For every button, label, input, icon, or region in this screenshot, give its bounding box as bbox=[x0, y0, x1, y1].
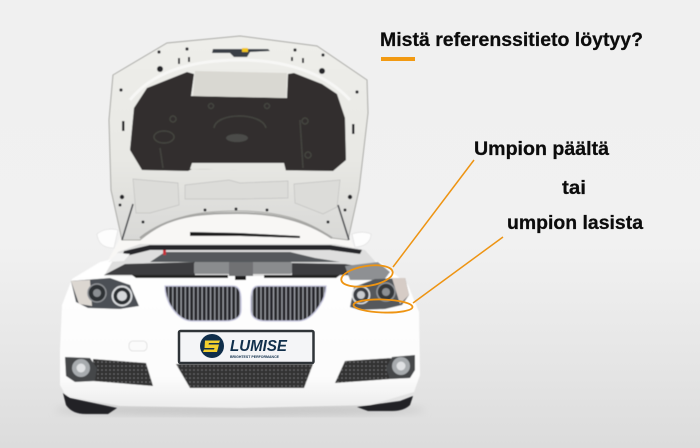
car photo illustration bbox=[60, 36, 420, 414]
logo badge bbox=[200, 334, 224, 358]
licence plate bbox=[179, 331, 314, 363]
left fog lamp bbox=[65, 357, 97, 382]
car body bbox=[60, 252, 420, 408]
lower hood embossed panels bbox=[133, 179, 340, 214]
pad highlights bbox=[154, 104, 311, 168]
tagline: BRIGHTEST PERFORMANCE bbox=[230, 355, 279, 359]
right headlight bbox=[350, 278, 409, 310]
open hood bbox=[109, 36, 368, 240]
arch shadow bbox=[140, 213, 332, 238]
plate frame bbox=[179, 331, 314, 363]
left tyre bbox=[63, 393, 117, 414]
latch yellow tag bbox=[242, 48, 248, 52]
title underline bbox=[381, 57, 415, 61]
right lower grille bbox=[335, 358, 391, 383]
vent panel bbox=[193, 71, 287, 98]
title: Mistä referenssitieto löytyy? bbox=[380, 30, 643, 51]
left headlight bbox=[71, 278, 139, 309]
right tyre bbox=[357, 396, 413, 411]
insulation pad bbox=[130, 72, 346, 171]
right kidney grille bbox=[251, 286, 326, 321]
callout: ellipse on headlight top bbox=[340, 262, 394, 290]
label: umpion lasista: umpion lasista bbox=[507, 213, 643, 234]
label: tai: tai bbox=[562, 178, 586, 199]
lower pad strip bbox=[190, 163, 286, 171]
right fog lamp bbox=[386, 355, 415, 379]
ground shadow bbox=[55, 404, 425, 416]
hood struts bbox=[122, 204, 349, 240]
left kidney grille bbox=[165, 286, 241, 321]
hood panel bbox=[109, 36, 368, 240]
arrow line: to headlight top bbox=[393, 160, 474, 267]
label: umpion päältä: Umpion päältä bbox=[474, 139, 609, 160]
mirror left bbox=[97, 229, 118, 248]
tow hook cover bbox=[129, 341, 147, 351]
engine bay background bbox=[95, 213, 372, 285]
hood inner rib bbox=[130, 60, 350, 100]
hood holes bbox=[118, 47, 359, 224]
callout: ellipse on headlight glass bbox=[353, 298, 413, 314]
brand name: LUMISE bbox=[230, 338, 288, 355]
hood latch bracket bbox=[212, 49, 270, 57]
left lower grille bbox=[93, 359, 153, 386]
centre lower grille bbox=[176, 364, 313, 388]
engine bay bbox=[104, 232, 390, 280]
arrow line: to headlight glass bbox=[413, 237, 503, 303]
mirror right bbox=[352, 232, 371, 247]
